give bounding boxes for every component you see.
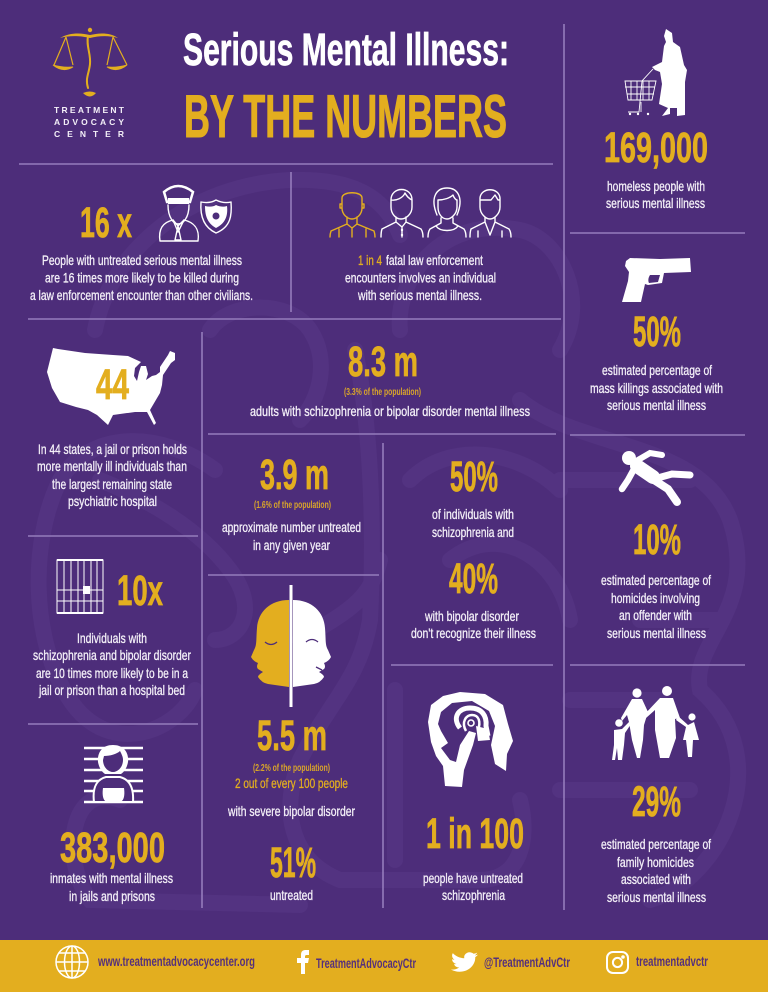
title: BY THE NUMBERS — [184, 83, 507, 150]
text: family homicides: estimated percentage of — [601, 836, 711, 852]
note: 1.6%: (1.6% of the population) — [254, 500, 331, 511]
text: 10 times: are 10 times more likely to be in a — [36, 665, 188, 681]
text: homeless: homeless people with — [607, 178, 705, 194]
stat: 5.5 m: 5.5 m — [257, 713, 327, 760]
text: 10 times: Individuals with — [77, 630, 147, 646]
icon: head within head — [428, 692, 513, 787]
text: untreated: untreated — [270, 887, 313, 903]
text: 16 times: People with untreated serious mental illness — [42, 252, 242, 268]
logo text: ADVOCACY — [54, 117, 124, 127]
panel: 29% family homicides — [601, 686, 711, 905]
icon: instagram — [607, 952, 628, 973]
panel: 50% mass killings — [590, 258, 723, 413]
icon: fallen body — [622, 451, 690, 502]
text: family homicides — [601, 836, 711, 905]
panel: 1 in 100 — [423, 692, 524, 903]
icon: handgun — [622, 258, 691, 302]
title — [183, 24, 509, 150]
text: mass killings: estimated percentage of — [602, 362, 712, 378]
panel: 10x jail — [33, 559, 191, 698]
text: schizophrenia: people have untreated — [423, 870, 523, 886]
text: untreated — [222, 519, 361, 553]
icon: jail window — [57, 559, 103, 614]
text: 1 in 4: with serious mental illness. — [357, 287, 482, 303]
icon: family — [612, 686, 699, 760]
stat: 169,000: 169,000 — [604, 125, 708, 172]
icon: prisoner line-up — [84, 745, 143, 802]
text: mass killings — [590, 362, 723, 413]
stat: 29%: 29% — [632, 779, 681, 826]
text: schizophrenia: of individuals with — [432, 506, 514, 522]
stat: 44: 44 — [96, 362, 129, 409]
stat: 1 in 100: 1 in 100 — [426, 811, 524, 858]
text: 1 in 4 — [345, 252, 496, 303]
text: 44 states: psychiatric hospital — [68, 493, 157, 509]
panel: 10% homicides — [601, 451, 711, 641]
panel: 383,000 inmates — [50, 745, 173, 904]
stat: 50%: 50% — [450, 454, 498, 501]
text: untreated: in any given year — [253, 537, 330, 553]
text: homicides — [601, 572, 711, 641]
stat: 383,000: 383,000 — [60, 825, 165, 872]
stat: 10%: 10% — [633, 517, 681, 564]
text: homicides: homicides involving — [611, 590, 700, 606]
text: schizophrenia: schizophrenia and — [432, 524, 514, 540]
note: 2.2%: (2.2% of the population) — [253, 763, 330, 774]
text: 2 out of every 100: 2 out of every 100 people — [235, 775, 348, 791]
text: homicides: serious mental illness — [607, 625, 706, 641]
icon: police officer and badge — [160, 186, 231, 241]
text: bipolar: with bipolar disorder — [424, 608, 519, 624]
logo: Treatment Advocacy Center — [53, 28, 127, 139]
text: 44 states: the largest remaining state — [52, 476, 172, 492]
text: mass killings: mass killings associated with — [590, 380, 723, 396]
icon: two faces — [251, 585, 331, 707]
note: 3.3%: (3.3% of the population) — [344, 387, 421, 398]
text: 1 in 4: 1 in 4 — [358, 252, 382, 268]
text: schizophrenia — [432, 506, 514, 540]
stat: 8.3 m: 8.3 m — [348, 339, 418, 386]
text: 10 times: jail or prison than a hospital bed — [38, 682, 185, 698]
panel: 8.3 m adults — [250, 339, 530, 419]
text: 16 times — [30, 252, 253, 303]
stat: 16 x: 16 x — [80, 200, 132, 247]
text: 10 times — [33, 630, 191, 698]
icon: facebook — [297, 950, 309, 974]
text: homicides: estimated percentage of — [601, 572, 711, 588]
stat: 3.9 m: 3.9 m — [260, 452, 329, 499]
icon: scales of justice — [53, 28, 127, 96]
icon: four people — [330, 188, 511, 237]
text: mass killings: serious mental illness — [607, 397, 706, 413]
stat: 51%: 51% — [270, 840, 316, 887]
panel: 5.5 m bipolar — [227, 585, 355, 903]
text: schizophrenia: schizophrenia — [442, 887, 505, 903]
text: twitter handle: @TreatmentAdvCtr — [484, 955, 571, 970]
stat: 10x: 10x — [117, 568, 163, 615]
icon: twitter — [451, 952, 478, 972]
text: inmates: in jails and prisons — [69, 888, 155, 904]
text: inmates — [50, 870, 173, 904]
text: schizophrenia — [423, 870, 523, 903]
panel: 1 in 4 fatal encounters — [330, 188, 511, 303]
text: family homicides: family homicides — [617, 854, 694, 870]
stat: 40%: 40% — [449, 556, 498, 603]
text: untreated: approximate number untreated — [222, 519, 361, 535]
text: homeless: serious mental illness — [606, 195, 705, 211]
panel: 16x police encounters — [30, 186, 253, 303]
text: bipolar — [411, 608, 536, 641]
panel: 44 states — [37, 348, 187, 509]
text: 44 states: In 44 states, a jail or prison holds — [38, 441, 187, 457]
logo text: TREATMENT — [54, 105, 125, 115]
panel: 50% and 40% insight — [411, 454, 536, 641]
icon: homeless person with cart — [625, 29, 687, 116]
text: bipolar: don't recognize their illness — [411, 625, 536, 641]
text: inmates: inmates with mental illness — [50, 870, 173, 886]
title: Serious Mental Illness: — [183, 24, 509, 75]
icon: US map — [47, 348, 175, 425]
icon: globe — [56, 946, 88, 978]
panel: 169,000 homeless — [604, 29, 708, 211]
logo text: CENTER — [54, 129, 124, 139]
text: family homicides: associated with — [621, 871, 691, 887]
text: adults: adults with schizophrenia or bipolar disorder mental illness — [250, 403, 530, 419]
text: 44 states — [37, 441, 187, 509]
text: 10 times: schizophrenia and bipolar disorder — [33, 647, 191, 663]
text: website: www.treatmentadvocacycenter.org — [97, 954, 255, 969]
text: instagram handle: treatmentadvctr — [636, 954, 709, 969]
text: 1 in 4: encounters involves an individual — [345, 270, 496, 286]
text: homeless — [606, 178, 705, 211]
text: 16 times: a law enforcement encounter than other civilians. — [30, 287, 253, 303]
text: severe bipolar: with severe bipolar disorder — [227, 803, 355, 819]
text: 16 times: are 16 times more likely to be killed during — [45, 270, 239, 286]
footer bar — [0, 940, 768, 992]
stat: 50%: 50% — [633, 309, 681, 356]
text: homicides: an offender with — [619, 607, 692, 623]
panel: 3.9 m untreated — [222, 452, 361, 553]
logo text — [54, 105, 125, 139]
text: 1 in 4: fatal law enforcement — [386, 252, 483, 268]
text: family homicides: serious mental illness — [607, 889, 706, 905]
text: 44 states: more mentally ill individuals than — [37, 458, 187, 474]
text: facebook handle: TreatmentAdvocacyCtr — [316, 956, 416, 971]
